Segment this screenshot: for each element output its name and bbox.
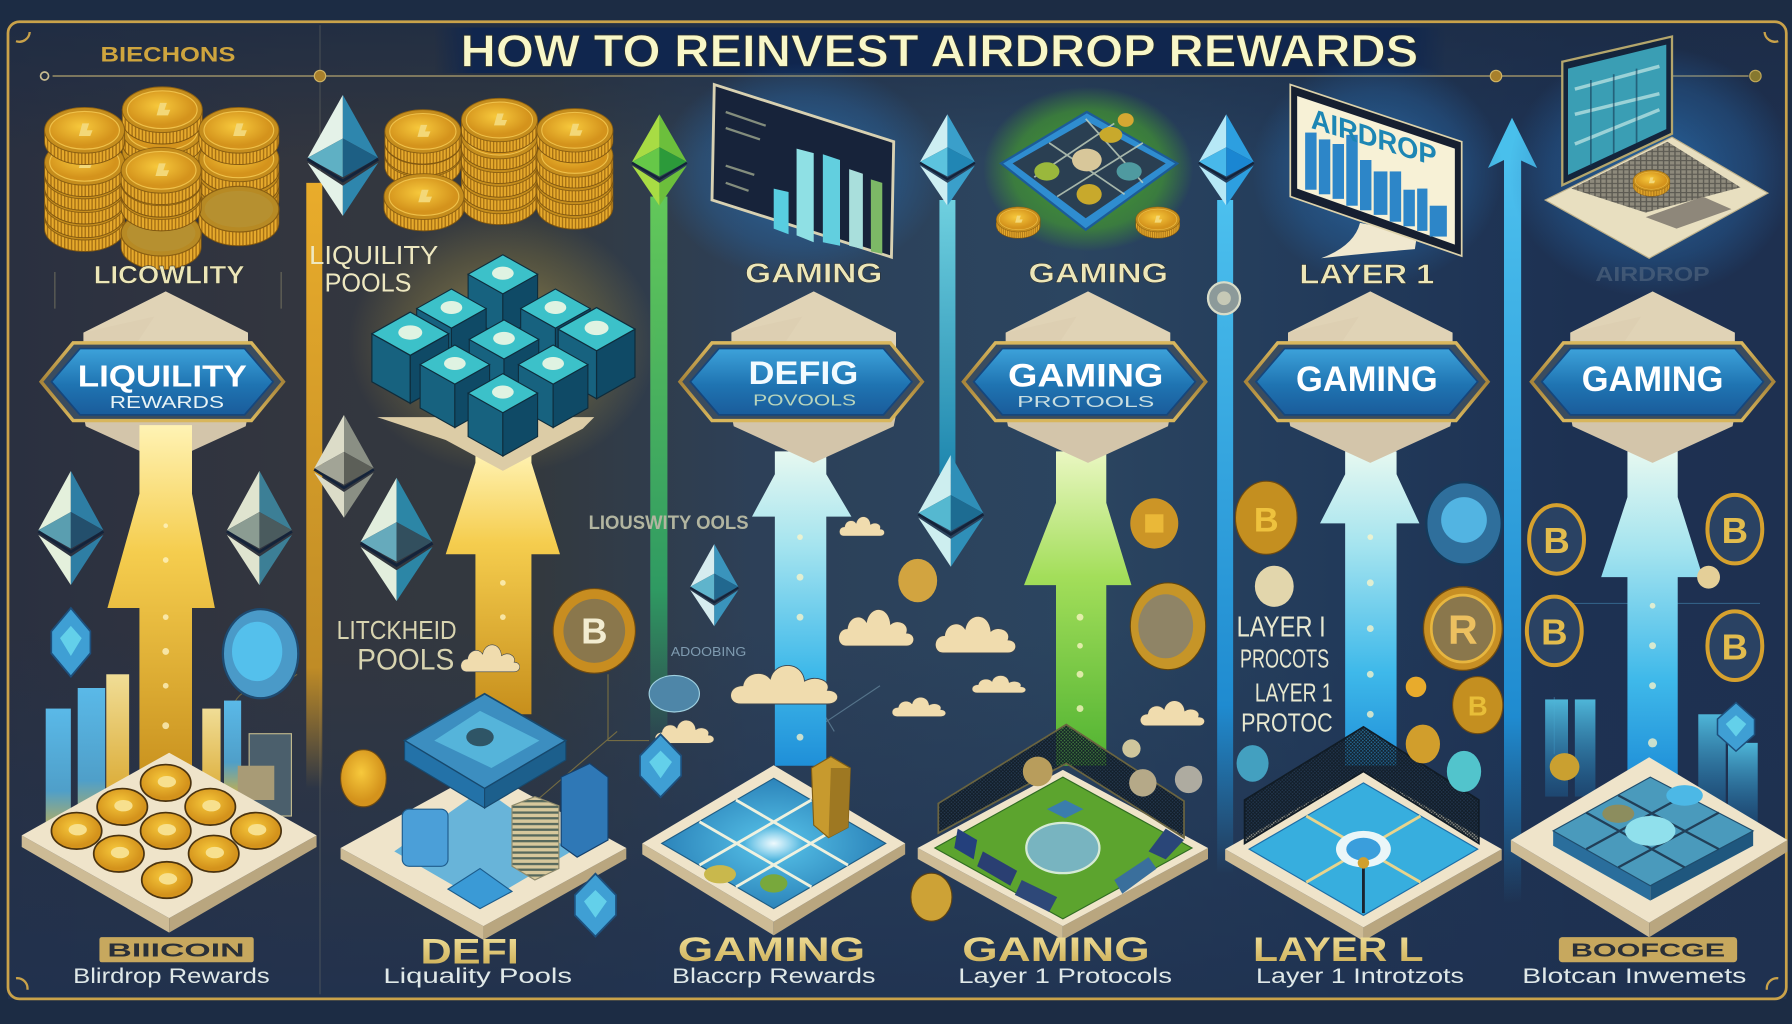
arrow: column 6 blue bbox=[1601, 451, 1703, 777]
floating label: adoobing: ADOOBING bbox=[671, 645, 746, 659]
column labels: GAMING bbox=[1029, 257, 1168, 288]
ringed B coins: column 6: B bbox=[1541, 612, 1567, 653]
badge: gaming protocols: GAMING bbox=[1008, 357, 1163, 393]
platform 3: tiles and tower bbox=[642, 757, 905, 935]
plinths behind badges bbox=[83, 291, 1735, 463]
floating label: litckheid pools: LITCKHEID bbox=[337, 615, 457, 645]
floating label: layer 1 protocols bbox=[1237, 612, 1333, 737]
coin stacks: left group bbox=[45, 87, 279, 270]
platform 1: coins bbox=[22, 753, 317, 933]
platform 6: blocks bbox=[1511, 757, 1787, 937]
ringed B coins: column 6 bbox=[1527, 495, 1762, 680]
floating label: layer 1 protocols: LAYER 1 bbox=[1255, 678, 1333, 708]
monitor: airdrop: AIRDROP bbox=[1311, 104, 1437, 173]
badge: gaming 6: GAMING bbox=[1582, 359, 1723, 399]
column labels: LAYER 1 bbox=[1299, 258, 1434, 289]
label: liquidity pools: POOLS bbox=[325, 267, 411, 297]
arrow: column 2 gold bbox=[446, 451, 560, 714]
cube cluster base bbox=[377, 417, 594, 471]
small gems and coins: R bbox=[1448, 606, 1478, 652]
badge: defi pools bbox=[680, 343, 922, 421]
small gems and coins: B bbox=[581, 610, 607, 651]
vertical connector: teal bbox=[939, 200, 955, 474]
footer: column 6 bbox=[1522, 937, 1746, 988]
label: liquidity pools bbox=[309, 240, 438, 297]
column 6 towers bbox=[1545, 699, 1758, 823]
glow: column 2 cubes bbox=[349, 211, 657, 474]
footer: column 5: Layer 1 Introtzots bbox=[1256, 963, 1464, 988]
game board bbox=[996, 112, 1180, 238]
floating label: layer 1 protocols: PROCOTS bbox=[1240, 643, 1329, 673]
vertical connector: green bbox=[650, 197, 667, 757]
footer: column 1: Blirdrop Rewards bbox=[73, 963, 270, 988]
footer: column 3: Blaccrp Rewards bbox=[672, 963, 876, 988]
floating label: litckheid pools bbox=[337, 615, 457, 677]
badge: gaming protocols bbox=[963, 343, 1206, 421]
badge: gaming protocols: PROTOOLS bbox=[1017, 394, 1154, 411]
diamond over arrow column bbox=[918, 455, 983, 567]
footer: column 1 bbox=[73, 937, 270, 988]
badge: gaming 6 bbox=[1531, 343, 1774, 421]
arrow: vertical blue with head bbox=[1488, 118, 1537, 903]
clouds bbox=[461, 517, 1205, 743]
title banner: HOW TO REINVEST AIRDROP REWARDS bbox=[461, 25, 1418, 76]
arrow: column 1 gold bbox=[107, 425, 215, 789]
coin stacks: right group bbox=[384, 98, 613, 231]
ringed B coins: column 6: B bbox=[1722, 510, 1748, 551]
footer: column 4: GAMING bbox=[962, 931, 1150, 969]
column labels: LICOWLITY bbox=[94, 261, 245, 289]
footer: column 2 bbox=[383, 931, 572, 988]
column labels: GAMING bbox=[745, 257, 882, 288]
badge: liquidity rewards bbox=[41, 343, 283, 421]
header divider with nodes bbox=[41, 70, 1761, 82]
column 1 bars bbox=[46, 674, 291, 846]
footer: column 2: Liquality Pools bbox=[383, 963, 572, 988]
footer: column 4 bbox=[958, 931, 1172, 988]
badge: liquidity rewards: REWARDS bbox=[110, 392, 224, 412]
floating label: liquidity pools small: LIOUSWITY OOLS bbox=[589, 512, 749, 534]
header tag: BIECHONS: BIECHONS bbox=[101, 42, 235, 67]
arrow: column 4 green bbox=[1024, 451, 1131, 766]
arrow dots bbox=[162, 523, 1657, 763]
label: liquidity pools: LIQUILITY bbox=[309, 240, 438, 270]
badge: gaming 5: GAMING bbox=[1296, 359, 1438, 399]
footer: column 6: Blotcan Inwemets bbox=[1522, 963, 1746, 988]
arrow: column 3 cyan bbox=[752, 451, 851, 766]
glow: green game board bbox=[983, 87, 1193, 251]
badge: defi pools: POVOOLS bbox=[753, 393, 856, 410]
column labels bbox=[94, 257, 1434, 289]
chart panel bbox=[712, 85, 894, 257]
monitor: airdrop bbox=[1290, 85, 1462, 258]
ringed B coins: column 6: B bbox=[1722, 626, 1748, 667]
small gems and coins bbox=[51, 481, 1755, 937]
arrow: column 5 blue bbox=[1320, 451, 1419, 766]
footer: column 5: LAYER L bbox=[1253, 931, 1423, 969]
floating label: layer 1 protocols: LAYER I bbox=[1237, 612, 1326, 644]
blockchain cube cluster bbox=[372, 255, 635, 456]
footer: column 2: DEFI bbox=[421, 931, 519, 971]
footer: column 5 bbox=[1253, 931, 1464, 988]
badge: liquidity rewards: LIQUILITY bbox=[78, 358, 247, 393]
platform 4: gaming field bbox=[918, 725, 1208, 940]
small gems and coins: B bbox=[1468, 690, 1488, 721]
vertical connector: blue bbox=[1208, 200, 1240, 874]
glow: monitor bbox=[1251, 57, 1503, 286]
badge: defi pools: DEFIG bbox=[749, 355, 858, 391]
decorative wire lines bbox=[55, 272, 1760, 800]
footer: column 3 bbox=[672, 931, 876, 988]
floating label: layer 1 protocols: PROTOC bbox=[1241, 707, 1333, 737]
faint label: column 6: AIRDROP bbox=[1595, 263, 1710, 286]
laptop bbox=[1545, 37, 1768, 258]
footer: column 6: BOOFCGE bbox=[1571, 940, 1725, 961]
glow: laptop bbox=[1509, 46, 1792, 297]
glow: chart panel bbox=[657, 63, 943, 280]
small gems and coins: B bbox=[1254, 501, 1279, 539]
footer: column 1: BIIICOIN bbox=[107, 940, 245, 961]
floating label: litckheid pools: POOLS bbox=[357, 644, 454, 677]
platform 2: defi server bbox=[341, 694, 626, 940]
platform 5: pool bbox=[1225, 727, 1502, 941]
footer: column 3: GAMING bbox=[678, 931, 865, 969]
icon: ethereum diamonds row bbox=[38, 95, 1254, 626]
badge: gaming 5 bbox=[1246, 343, 1488, 421]
footer: column 4: Layer 1 Protocols bbox=[958, 963, 1172, 988]
vertical connector: gold bbox=[306, 183, 322, 789]
ringed B coins: column 6: B bbox=[1543, 520, 1570, 561]
